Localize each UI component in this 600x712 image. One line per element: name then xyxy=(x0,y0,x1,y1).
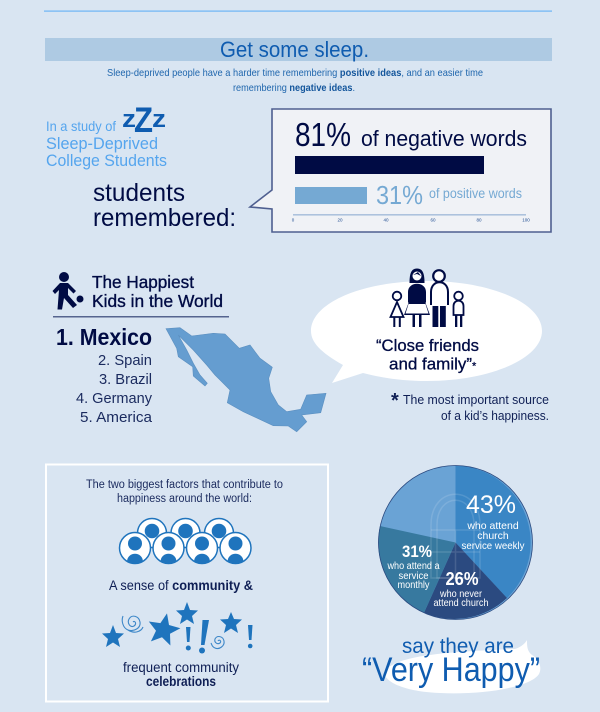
label: 43% weekly: who attend xyxy=(466,520,519,532)
intro text: Sleep-deprived people have a harder time remembering positive ideas, and an easier time xyxy=(107,67,483,79)
negative words label xyxy=(295,116,527,153)
positive bar xyxy=(295,187,367,204)
spirals xyxy=(122,616,224,649)
footnote: * xyxy=(391,390,399,412)
quote text: “Close friends xyxy=(376,336,479,355)
label: 31% monthly: 31% xyxy=(402,542,432,561)
study description: In a study of xyxy=(46,118,116,134)
icon: zzz xyxy=(122,101,166,140)
negative words label: of negative words xyxy=(361,126,527,151)
students remembered label: remembered: xyxy=(93,204,236,232)
father xyxy=(431,270,448,327)
icon: zzz: Z xyxy=(134,101,153,140)
icon: child kicking ball xyxy=(52,272,84,310)
icon: family xyxy=(390,268,464,327)
quote text: and family” xyxy=(389,354,472,374)
celebrations caption: frequent community xyxy=(123,660,239,675)
footnote xyxy=(391,390,549,423)
axis: 80 xyxy=(476,218,482,222)
students remembered label xyxy=(93,179,236,232)
intro text xyxy=(107,67,483,94)
slice: never 26% xyxy=(424,542,507,619)
exclamation marks xyxy=(186,620,252,654)
icon: community of people xyxy=(120,518,251,564)
label: 26% never: 26% xyxy=(446,569,478,589)
positive words label: 31% xyxy=(376,180,423,210)
bar chart callout xyxy=(250,109,551,232)
slice: monthly 31% xyxy=(378,526,456,613)
footnote: The most important source xyxy=(403,392,549,407)
label: 26% never: attend church xyxy=(434,598,488,609)
map: Mexico xyxy=(166,328,326,432)
panel intro text: happiness around the world: xyxy=(117,493,252,505)
ranking list: 1. Mexico xyxy=(56,324,152,350)
positive words label xyxy=(376,180,522,210)
panel: happiness factors xyxy=(46,464,328,702)
label: 31% monthly: monthly xyxy=(398,580,430,591)
axis: 60 xyxy=(430,218,436,222)
ranking list: 2. Spain xyxy=(98,352,152,369)
negative words label: 81% xyxy=(295,116,351,153)
very happy caption: “Very Happy” xyxy=(362,651,540,689)
heading: happiest kids xyxy=(92,272,223,311)
ranking list xyxy=(56,324,153,426)
section: get some sleep xyxy=(45,37,552,94)
label: 43% weekly: church xyxy=(477,530,509,542)
heading: happiest kids: Kids in the World xyxy=(92,291,223,311)
slice: weekly 43% xyxy=(456,466,531,598)
axis: 100 xyxy=(522,218,530,222)
icon: zzz: z xyxy=(122,106,136,133)
label: 43% weekly: 43% xyxy=(466,491,516,519)
pie chart: church attendance xyxy=(378,466,532,620)
negative bar xyxy=(295,156,484,174)
speech bubble xyxy=(311,281,542,383)
quote text xyxy=(376,336,479,374)
icon: stars and celebration marks xyxy=(102,602,252,654)
axis: 40 xyxy=(383,218,389,222)
label: 31% monthly: service xyxy=(398,571,429,582)
study description: College Students xyxy=(46,152,167,170)
study description xyxy=(46,118,167,170)
label: 26% never xyxy=(434,569,488,609)
footnote: of a kid’s happiness. xyxy=(441,408,549,423)
celebrations caption xyxy=(123,660,239,689)
positive words label: of positive words xyxy=(429,186,522,201)
label: 26% never: who never xyxy=(439,589,483,600)
ranking list: 4. Germany xyxy=(76,390,152,407)
church window watermark xyxy=(431,494,480,578)
axis: 0 xyxy=(292,218,295,222)
ranking list: 5. America xyxy=(80,409,153,426)
heading banner xyxy=(45,37,552,62)
label: 43% weekly: service weekly xyxy=(462,540,525,552)
quote text: * xyxy=(472,360,477,372)
axis xyxy=(292,214,530,222)
heading: happiest kids: The Happiest xyxy=(92,272,194,292)
label: 31% monthly: who attend a xyxy=(387,561,440,572)
label: 43% weekly xyxy=(462,491,525,552)
axis: 20 xyxy=(337,218,343,222)
boy xyxy=(454,292,464,327)
label: 31% monthly xyxy=(387,542,440,591)
heading banner: Get some sleep. xyxy=(220,37,369,62)
panel intro text: The two biggest factors that contribute to xyxy=(86,479,283,491)
panel intro text xyxy=(86,479,283,505)
girl xyxy=(390,292,404,327)
very happy caption xyxy=(362,634,540,693)
community caption: A sense of community & xyxy=(109,577,253,593)
mother xyxy=(404,268,430,327)
intro text: remembering negative ideas. xyxy=(233,82,355,94)
students remembered label: students xyxy=(93,179,185,207)
study description: Sleep-Deprived xyxy=(46,135,158,153)
ranking list: 3. Brazil xyxy=(99,371,152,388)
icon: zzz: z xyxy=(152,106,166,133)
celebrations caption: celebrations xyxy=(146,674,216,689)
very happy caption: say they are xyxy=(402,634,514,658)
